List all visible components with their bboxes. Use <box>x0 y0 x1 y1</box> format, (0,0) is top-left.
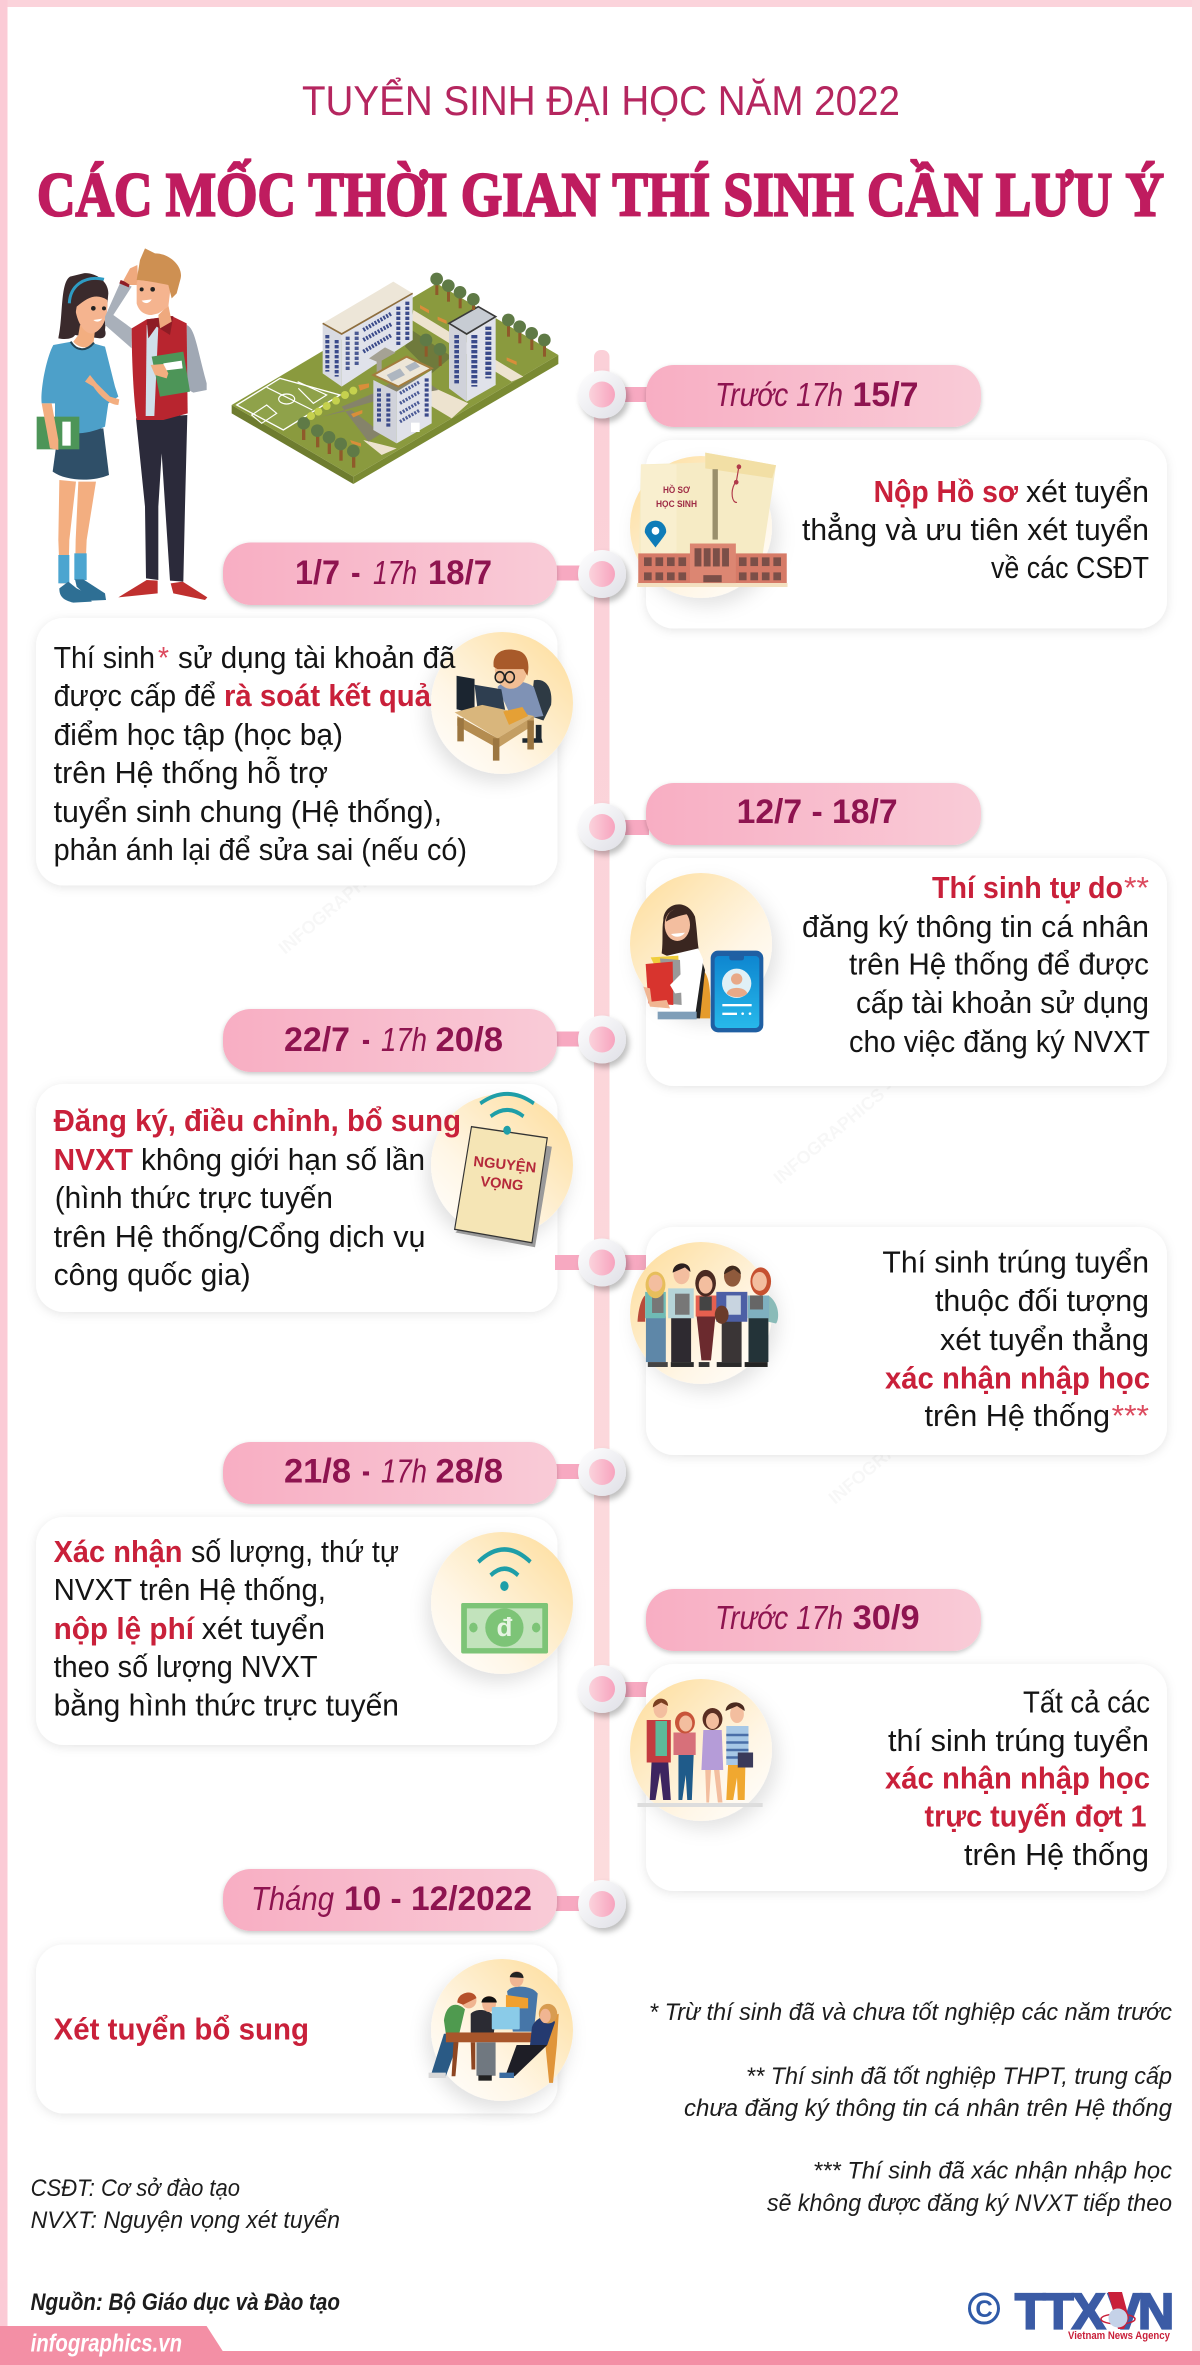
card text: xét tuyển <box>202 1611 325 1646</box>
card <box>646 858 1167 1086</box>
card text: đăng ký thông tin cá nhân <box>802 909 1149 944</box>
timeline node <box>578 803 626 851</box>
date pill: 10 - 12/2022 <box>344 1880 532 1918</box>
card text: Xét tuyển bổ sung <box>54 2012 309 2047</box>
card text <box>882 1245 1150 1433</box>
subtitle: TUYỂN SINH ĐẠI HỌC NĂM 2022 <box>302 76 900 124</box>
connector <box>555 1896 581 1911</box>
watermarks: INFOGRAPHICS - TTXVN <box>770 1036 946 1188</box>
watermarks <box>275 771 946 1508</box>
card text: xác nhận nhập học <box>885 1360 1150 1396</box>
card text: trên Hệ thống <box>964 1837 1149 1872</box>
date pill: Trước 17h <box>715 1599 843 1636</box>
card text: trên Hệ thống để được <box>849 946 1149 982</box>
timeline node <box>578 370 626 418</box>
connector <box>625 1682 649 1697</box>
icon: wifi and banknote <box>431 1532 573 1674</box>
date pill: - <box>362 1021 370 1059</box>
footer band <box>0 2326 1200 2365</box>
icon: wifi and banknote: đ <box>496 1612 512 1642</box>
card text: (hình thức trực tuyến <box>55 1180 333 1215</box>
connector <box>555 1464 581 1479</box>
date pill: 20/8 <box>436 1021 503 1059</box>
icon: dossier and school: HỌC SINH <box>656 499 697 510</box>
icon: four students <box>630 1679 772 1821</box>
connector <box>555 1032 581 1046</box>
timeline node <box>578 550 626 598</box>
card text: NVXT <box>54 1142 133 1177</box>
connector <box>555 566 581 580</box>
date pill: 17h <box>373 554 417 591</box>
card text: * <box>158 640 169 675</box>
milestone: before 17h 15/7 <box>578 365 1167 628</box>
footer band: infographics.vn <box>31 2330 182 2358</box>
date pill: 17h <box>381 1452 427 1490</box>
card text: trên Hệ thống hỗ trợ <box>54 755 328 790</box>
timeline node <box>578 1448 626 1496</box>
card text: thí sinh trúng tuyển <box>888 1723 1149 1758</box>
card text: NVXT trên Hệ thống, <box>54 1572 326 1607</box>
card text: trực tuyến đợt 1 <box>924 1798 1146 1834</box>
icon: wish document with wifi: NGUYỆN <box>473 1152 537 1177</box>
connector <box>625 387 649 402</box>
card text: Thí sinh tự do <box>932 870 1123 905</box>
date pill: 30/9 <box>853 1599 920 1637</box>
card text: Tất cả các <box>1023 1684 1150 1720</box>
connectors <box>555 1255 649 1270</box>
card <box>36 1517 558 1745</box>
card text: xác nhận nhập học <box>885 1760 1150 1796</box>
card text: Xác nhận <box>54 1534 182 1569</box>
watermarks: INFOGRAPHICS <box>825 1404 943 1508</box>
timeline node <box>578 1880 626 1928</box>
card text <box>54 1103 461 1292</box>
card text: xét tuyển thẳng <box>940 1321 1149 1357</box>
card text: ** <box>1124 870 1149 905</box>
date pill: 21/8 <box>284 1452 351 1490</box>
milestone: month 10 - 12/2022 <box>36 1869 626 2114</box>
logo: TTXVN: C <box>975 2296 993 2323</box>
footnotes: chưa đăng ký thông tin cá nhân trên Hệ thống <box>684 2095 1173 2122</box>
milestone: before 17h 30/9 <box>578 1589 1167 1891</box>
date pill <box>646 365 981 427</box>
card text: tuyển sinh chung (Hệ thống), <box>54 794 442 829</box>
footnotes: sẽ không được đăng ký NVXT tiếp theo <box>767 2190 1172 2217</box>
card text: Thí sinh trúng tuyển <box>882 1245 1149 1280</box>
icon: wish document with wifi: VỌNG <box>480 1174 524 1194</box>
card text: số lượng, thứ tự <box>191 1534 399 1569</box>
card text: bằng hình thức trực tuyến <box>54 1688 399 1722</box>
footnotes: ** Thí sinh đã tốt nghiệp THPT, trung cấp <box>746 2063 1172 2090</box>
card text: cho việc đăng ký NVXT <box>849 1024 1150 1059</box>
date pill: 17h <box>381 1021 427 1058</box>
milestone: 21/8 - 17h 28/8 <box>36 1442 626 1745</box>
card text <box>802 474 1149 585</box>
icon: five students <box>630 1242 778 1384</box>
date pill: 12/7 - 18/7 <box>737 793 898 831</box>
icon: girl with phone <box>630 873 772 1032</box>
card text: Nộp Hồ sơ <box>874 474 1019 509</box>
card text: *** <box>1112 1398 1149 1433</box>
card text: Đăng ký, điều chỉnh, bổ sung <box>54 1103 461 1138</box>
milestone: 1/7 - 17h 18/7 <box>36 542 626 886</box>
date pill <box>223 1009 557 1072</box>
icon: wish document with wifi <box>431 1094 573 1247</box>
abbreviations: CSĐT: Cơ sở đào tạo <box>31 2175 240 2202</box>
card <box>646 1227 1167 1455</box>
card text <box>54 1534 399 1722</box>
card text: nộp lệ phí <box>54 1611 195 1646</box>
date pill <box>646 1589 981 1651</box>
date pill <box>223 1442 557 1504</box>
watermarks: INFOGRAPHICS - TTXVN - VNA <box>275 771 492 958</box>
card <box>36 1084 558 1312</box>
card text: theo số lượng NVXT <box>54 1649 318 1684</box>
watermarks: INFOGRAPHICS <box>315 1179 433 1283</box>
card text: không giới hạn số lần <box>141 1142 425 1177</box>
date pill: Trước 17h <box>715 376 843 413</box>
card text <box>802 870 1150 1059</box>
logo: TTXVN: Vietnam News Agency <box>1068 2330 1171 2342</box>
logo: TTXVN: TTXVN <box>1015 2284 1174 2340</box>
date pill: 28/8 <box>436 1452 503 1490</box>
milestone: direct admission confirmation <box>555 1227 1167 1455</box>
footnotes: * Trừ thí sinh đã và chưa tốt nghiệp các năm trước <box>649 1999 1172 2026</box>
illustration: isometric campus <box>232 273 558 484</box>
card text <box>54 640 467 867</box>
card text: Thí sinh <box>54 640 155 675</box>
abbreviations <box>31 2175 340 2234</box>
date pill: - <box>351 554 360 592</box>
icon: dossier and school <box>630 453 788 598</box>
date pill: Tháng <box>251 1880 335 1917</box>
source: Nguồn: Bộ Giáo dục và Đào tạo <box>31 2289 340 2316</box>
card <box>36 618 558 886</box>
milestone: 12/7 - 18/7 <box>578 783 1167 1086</box>
card text: rà soát kết quả <box>224 678 432 713</box>
date pill <box>223 1869 557 1931</box>
card text: thuộc đối tượng <box>935 1283 1149 1318</box>
date pill: 22/7 <box>284 1021 350 1059</box>
connector <box>625 820 649 835</box>
milestone: 22/7 - 17h 20/8 <box>36 1009 626 1312</box>
date pill: - <box>362 1452 370 1490</box>
card text: về các CSĐT <box>991 550 1149 585</box>
card text: xét tuyển <box>1026 474 1149 509</box>
timeline node <box>578 1665 626 1713</box>
card text: điểm học tập (học bạ) <box>54 717 343 752</box>
timeline node <box>578 1238 626 1286</box>
card text <box>885 1684 1150 1872</box>
card text: trên Hệ thống <box>924 1398 1110 1433</box>
date pill: 18/7 <box>428 554 492 592</box>
date pill: 1/7 <box>295 554 340 592</box>
date pill: 15/7 <box>852 376 918 414</box>
abbreviations: NVXT: Nguyện vọng xét tuyển <box>31 2207 340 2234</box>
card text: được cấp để <box>54 678 216 713</box>
card text: công quốc gia) <box>54 1257 251 1292</box>
card <box>646 1664 1167 1891</box>
timeline spine <box>594 350 610 1920</box>
icon: dossier and school: HỒ SƠ <box>663 484 691 496</box>
card text: phản ánh lại để sửa sai (nếu có) <box>54 832 467 867</box>
watermarks: TTXVN - VNA <box>690 1345 789 1433</box>
card <box>36 1944 558 2114</box>
illustration: two students <box>37 248 207 603</box>
card text: sử dụng tài khoản đã <box>178 640 456 675</box>
icon: team at table <box>429 1959 573 2101</box>
card text: cấp tài khoản sử dụng <box>856 985 1149 1020</box>
card <box>646 440 1167 628</box>
footnotes <box>649 1999 1173 2217</box>
date pill <box>646 783 981 845</box>
card text: thẳng và ưu tiên xét tuyển <box>802 511 1149 547</box>
timeline node <box>578 1016 626 1064</box>
card text: trên Hệ thống/Cổng dịch vụ <box>54 1219 425 1254</box>
icon: student at computer <box>431 632 573 774</box>
date pill <box>223 542 557 605</box>
footnotes: *** Thí sinh đã xác nhận nhập học <box>813 2158 1172 2184</box>
